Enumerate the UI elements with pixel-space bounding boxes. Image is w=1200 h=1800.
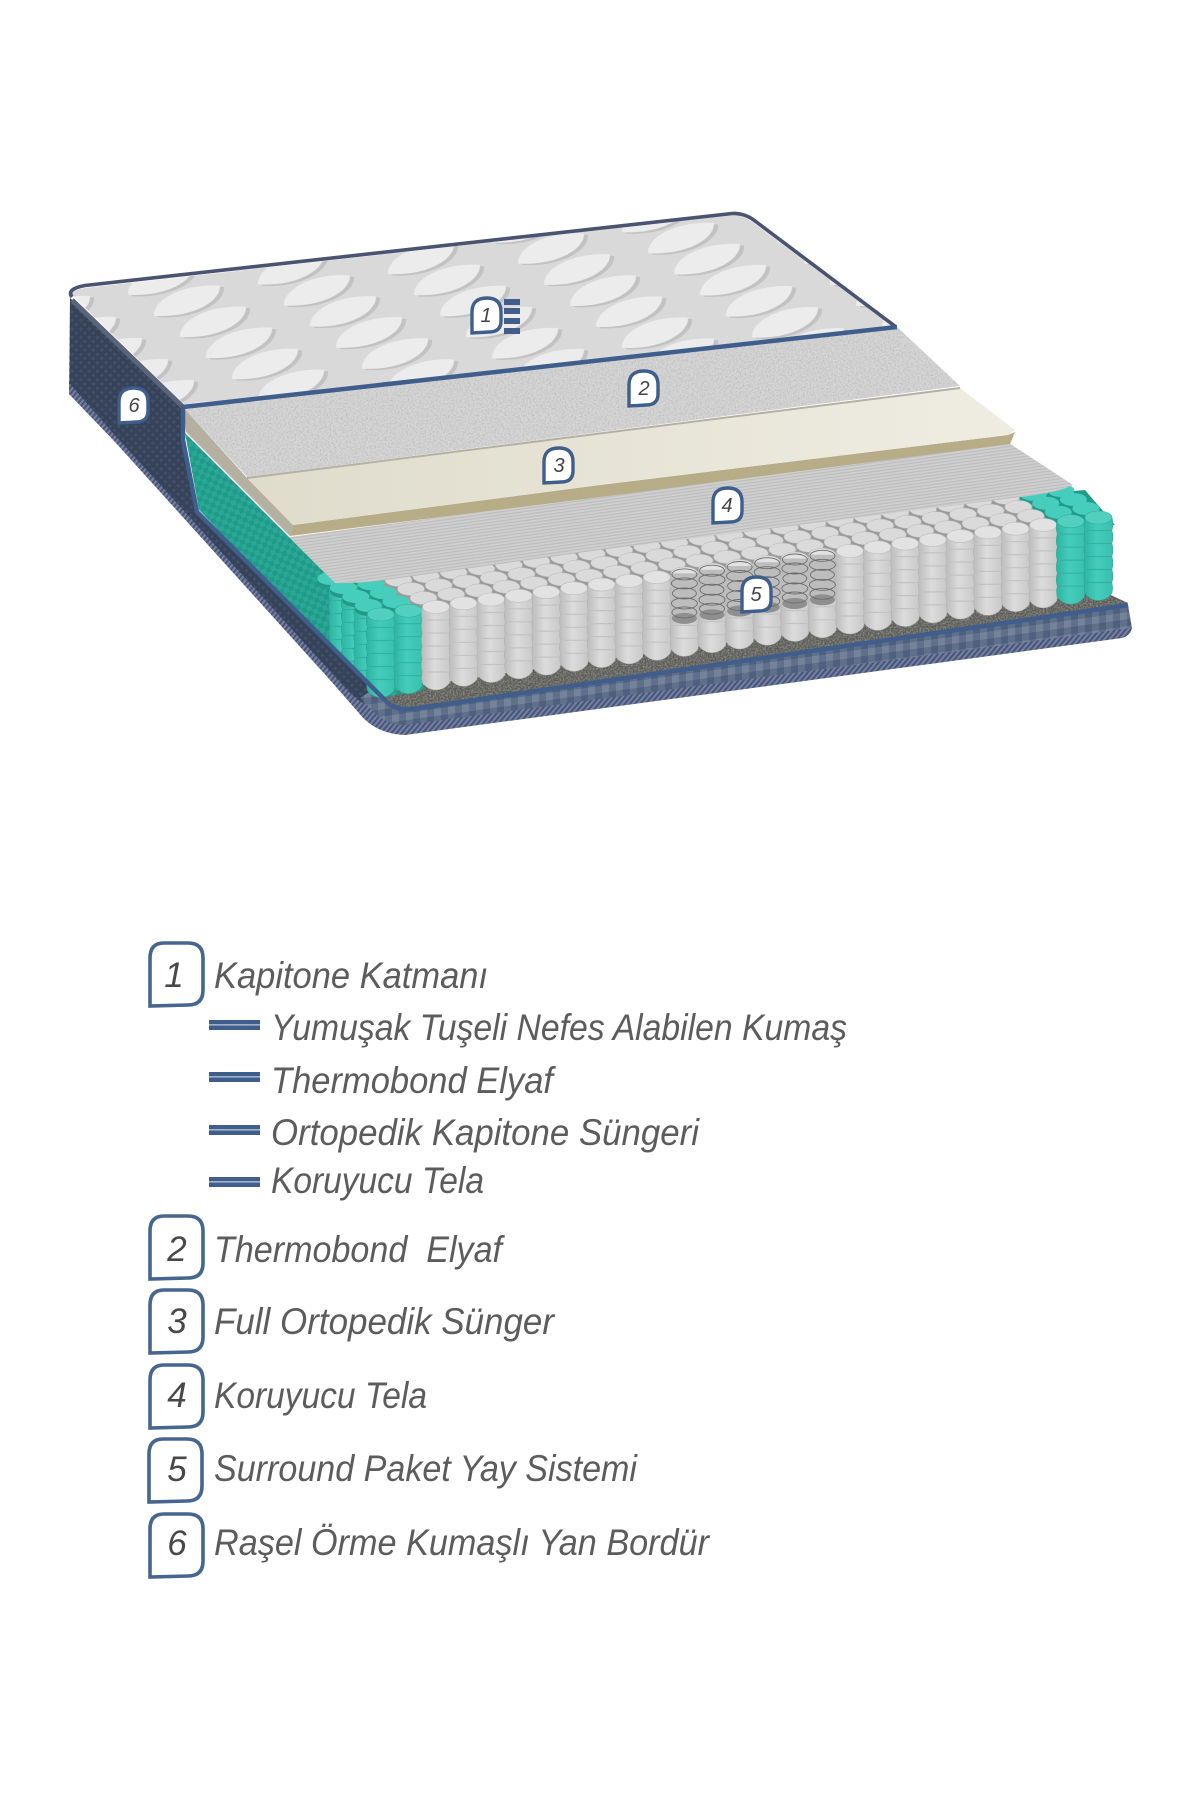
legend item 2: Thermobond Elyaf: 2 (166, 1230, 187, 1269)
outer piping of side and base (69, 298, 1132, 735)
thermobond fibre layer (183, 327, 960, 477)
badge 2 (629, 371, 658, 406)
back spring gap (340, 495, 1090, 612)
badge 3 (544, 448, 573, 483)
badge 5: 5 (750, 584, 762, 606)
teal side foam (185, 433, 423, 697)
badge 4: 4 (721, 495, 733, 517)
blue cutaway line (183, 327, 1128, 709)
sub item: Ortopedik Kapitone Süngeri: Ortopedik Kapitone Süngeri (271, 1112, 701, 1153)
sub item: Thermobond Elyaf: Thermobond Elyaf (271, 1060, 556, 1101)
legend item 2: Thermobond Elyaf (150, 1216, 505, 1279)
legend item 3: Full Ortopedik Sünger: Full Ortopedik Sünger (214, 1301, 556, 1342)
teal corner spring wall (329, 585, 382, 679)
right teal gap (1030, 490, 1115, 530)
badge 6 (119, 388, 148, 423)
legend item 6: Raşel Örme Kumaşlı Yan Bordür (150, 1514, 711, 1577)
legend item 6: Raşel Örme Kumaşlı Yan Bordür: Raşel Örme Kumaşlı Yan Bordür (214, 1522, 711, 1563)
left upper piping (72, 300, 183, 407)
legend item 4: Koruyucu Tela (150, 1365, 427, 1428)
foam side (290, 432, 1015, 536)
fibre layer edge (247, 388, 960, 478)
legend (149, 943, 847, 1577)
left side border fabric (70, 298, 378, 703)
legend item 5: Surround Paket Yay Sistemi: 5 (167, 1450, 187, 1489)
legend item 1: Kapitone Katmanı: 1 (164, 956, 184, 995)
badge 5 (742, 577, 771, 612)
legend item 3: Full Ortopedik Sünger (150, 1290, 556, 1353)
legend item 1: Kapitone Katmanı (150, 943, 488, 1006)
quilted top layer (72, 215, 892, 405)
legend item 3: Full Ortopedik Sünger: 3 (167, 1302, 187, 1341)
pocket spring front row (366, 511, 1113, 698)
legend item 5: Surround Paket Yay Sistemi (149, 1439, 639, 1502)
badge 2: 2 (637, 378, 650, 400)
sub item: Yumuşak Tuşeli Nefes Alabilen Kumaş: Yumuşak Tuşeli Nefes Alabilen Kumaş (271, 1007, 847, 1048)
legend item 4: Koruyucu Tela: 4 (167, 1376, 187, 1415)
base check fabric (360, 605, 1131, 725)
pocket spring back rows (317, 475, 1099, 616)
badge 1 with layer bars: 1 (480, 305, 492, 327)
sub item: Koruyucu Tela: Koruyucu Tela (271, 1160, 484, 1201)
badge 4 (713, 488, 742, 523)
legend item 2: Thermobond Elyaf: Thermobond Elyaf (214, 1229, 505, 1270)
legend item 1: Kapitone Katmanı: Kapitone Katmanı (214, 955, 488, 996)
bottom floor felt (370, 590, 1128, 708)
foam left edge (183, 407, 293, 536)
protective cloth layer (289, 443, 1073, 583)
badge 3: 3 (553, 455, 565, 477)
badge 6: 6 (128, 395, 140, 417)
top piping (71, 213, 896, 327)
badge 1 with layer bars (472, 298, 520, 334)
full orthopedic foam top (247, 388, 1015, 525)
legend item 6: Raşel Örme Kumaşlı Yan Bordür: 6 (167, 1524, 187, 1563)
legend item 4: Koruyucu Tela: Koruyucu Tela (214, 1375, 427, 1416)
mattress illustration (69, 213, 1132, 735)
legend item 5: Surround Paket Yay Sistemi: Surround Paket Yay Sistemi (214, 1448, 639, 1489)
